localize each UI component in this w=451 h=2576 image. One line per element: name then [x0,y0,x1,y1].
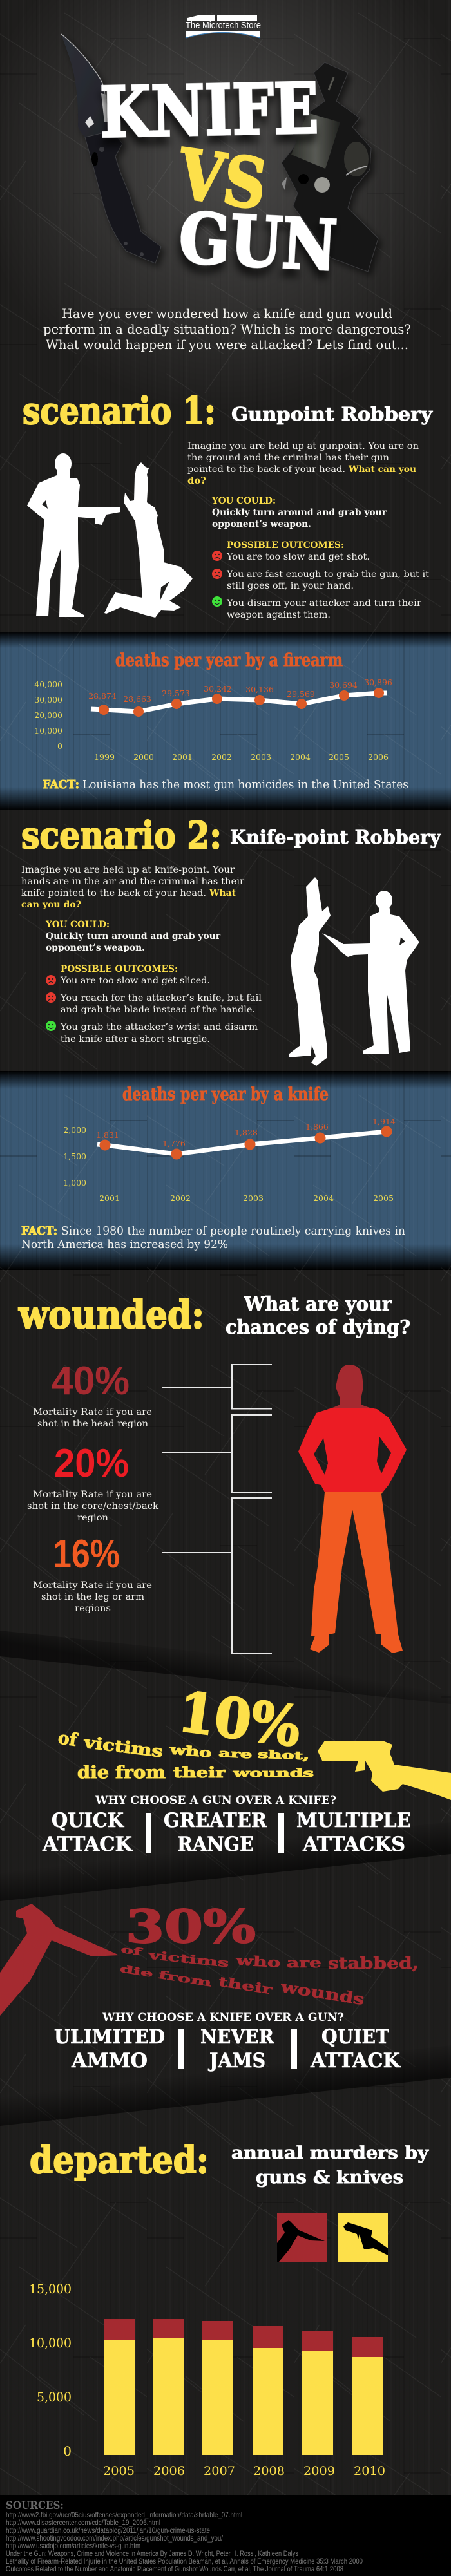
intro text: perform in a deadly situation? Which is more dangerous? [43,321,411,337]
list: why choose a gun: QUICK [52,1809,124,1832]
heading: wounded: What are your [244,1293,392,1316]
stat: 16% limbs: Mortality Rate if you are [33,1580,152,1591]
stat: 20% core: shot in the core/chest/back [27,1501,159,1511]
stat: 10% of shot victims die: are [218,1747,253,1761]
list: why choose a gun: RANGE [177,1833,254,1856]
line chart: deaths per year by a firearm: 28,874 [88,691,117,701]
line chart: deaths per year by a firearm: 30,000 [34,695,62,705]
line chart: deaths per year by a knife: 2005 [373,1193,394,1203]
text: scenario 1 description: What can you [348,464,416,475]
list: why choose a gun: MULTIPLE [296,1809,411,1832]
list: why choose a gun: ATTACK [42,1833,133,1856]
stat: 20% core [27,1441,159,1523]
heading: scenario 2 [21,813,441,857]
heading: scenario 1 [23,389,433,433]
footer: sources: http://www.disastercenter.com/cdc/Table_19_2006.html [6,2518,160,2527]
intro text [43,306,411,352]
logo: The Microtech Store: The Microtech Store [186,20,261,31]
fact: knife carrying: FACT: [21,1224,57,1238]
heading: scenario 2: Knife-point Robbery [230,826,441,848]
list: why choose a gun: WHY CHOOSE A GUN OVER A KNIFE? [95,1794,336,1807]
stacked bar chart: annual murders: 2005 [103,2464,135,2478]
text: scenario 1 description: do? [187,476,206,486]
stacked bar chart: annual murders: 10,000 [29,2335,72,2351]
stat: 10% of shot victims die: die [77,1763,109,1783]
list: possible outcomes scenario 2 [46,964,262,1045]
line chart: deaths per year by a firearm: 2000 [133,752,154,762]
footer: sources [0,2496,451,2576]
list: why choose a knife: JAMS [207,2049,265,2072]
stat: 16% limbs: regions [75,1604,111,1614]
text: you could [45,920,221,953]
text: scenario 1 description [187,441,419,486]
line chart: deaths per year by a firearm: 30,896 [364,677,392,687]
stat: 30% of stabbed victims die [119,1900,419,2009]
line chart: deaths per year by a firearm: 30,136 [245,685,274,694]
figure: body regions [298,1365,407,1653]
fact: Louisiana: Louisiana has the most gun homicides in the United States [82,778,408,791]
list: why choose a gun: ATTACKS [302,1833,405,1856]
stat: 30% of stabbed victims die: 30% [126,1900,256,1953]
line chart: deaths per year by a knife: 1,500 [63,1151,86,1161]
line chart: deaths per year by a firearm: 10,000 [34,726,62,735]
line chart: deaths per year by a knife: 2001 [99,1193,120,1203]
line chart: deaths per year by a firearm: 2005 [329,752,349,762]
stat: 10% of shot victims die: of [57,1728,80,1750]
intro text: Have you ever wondered how a knife and gun would [62,306,392,321]
stat: 40% head: Mortality Rate if you are [33,1407,152,1417]
line chart: deaths per year by a knife: 2003 [243,1193,264,1203]
line chart: deaths per year by a knife: 1,866 [305,1122,329,1132]
icon: revolver [282,62,378,272]
list: possible outcomes scenario 2: the knife after a short struggle. [61,1034,210,1045]
list: possible outcomes scenario 1: You are fast enough to grab the gun, but it [226,569,429,580]
stat: 16% limbs: 16% [53,1532,120,1577]
icon: sad face [212,551,222,561]
heading: scenario 1: Gunpoint Robbery [231,403,433,425]
icon: sad face [46,992,56,1003]
icon: sad face [212,569,222,579]
list: possible outcomes scenario 2: and grab the blade instead of the handle. [61,1005,255,1015]
text: scenario 2 description: knife pointed to the back of your head. [21,888,206,898]
heading: scenario 1: scenario 1: [23,389,216,433]
line chart: deaths per year by a firearm: 2006 [368,752,389,762]
line chart: deaths per year by a firearm: 29,569 [287,689,315,699]
stacked bar chart: annual murders: 2010 [354,2464,385,2478]
stat: 30% of stabbed victims die: victims [147,1948,229,1971]
text: scenario 2 description: Imagine you are held up at knife-point. Your [21,865,235,875]
stat: 30% of stabbed victims die: from [158,1969,213,1990]
list: possible outcomes scenario 1: POSSIBLE OUTCOMES: [227,540,344,551]
footer: sources: http://www.shootingvoodoo.com/index.php/articles/gunshot_wounds_and_you/ [6,2533,224,2543]
heading: scenario 2: scenario 2: [21,813,222,857]
stat: 16% limbs [33,1532,152,1614]
line chart: deaths per year by a firearm: 1999 [94,752,115,762]
heading: departed [30,2138,429,2188]
text: scenario 2 description [21,865,244,910]
list: possible outcomes scenario 1: weapon against them. [227,610,331,620]
text: you could [211,496,387,529]
list: why choose a knife: NEVER [200,2025,274,2049]
line chart: deaths per year by a knife: 1,831 [96,1130,119,1140]
list: possible outcomes scenario 1: You are too slow and get shot. [226,552,370,562]
stat: 30% of stabbed victims die: who [235,1952,281,1971]
stacked bar chart: annual murders: 5,000 [37,2389,72,2405]
line chart: deaths per year by a knife: 1,914 [372,1117,396,1126]
footer: sources: Lethality of Firearm-Related Injurie in the United States Population Beaman, et al, Annals of Emergency Medicine 35:3 March 2000 [6,2557,363,2566]
line chart: deaths per year by a firearm: 2004 [290,752,311,762]
text: scenario 2 description: What [209,888,236,898]
intro text: What would happen if you were attacked? Lets find out... [46,337,408,352]
stacked bar chart: annual murders: 2007 [204,2464,235,2478]
list: why choose a knife: ULIMITED [54,2025,165,2049]
icon: folding knife [61,34,161,263]
stat: 10% of shot victims die: who [168,1741,213,1761]
list: possible outcomes scenario 2: You grab the attacker’s wrist and disarm [60,1022,258,1032]
list: why choose a gun [42,1794,411,1856]
line chart: deaths per year by a firearm: 2001 [172,752,193,762]
fact: knife carrying: North America has increased by 92% [21,1238,228,1251]
list: why choose a knife [54,2011,401,2072]
text: you could: Quickly turn around and grab your [212,507,387,518]
stat: 10% of shot victims die: 10% [175,1680,304,1759]
line chart: deaths per year by a firearm: 29,573 [162,688,190,698]
list: why choose a knife: ATTACK [310,2049,401,2072]
chart title: firearm deaths: deaths per year by a firearm [115,650,343,670]
list: possible outcomes scenario 1 [212,540,429,620]
footer: sources: http://www.usadojo.com/articles/knife-vs-gun.htm [6,2541,140,2550]
stat: 30% of stabbed victims die: stabbed, [328,1954,419,1973]
heading: departed: annual murders by [231,2143,429,2163]
stat: 10% of shot victims die: shot, [258,1748,309,1763]
stacked bar chart: annual murders: 15,000 [29,2281,72,2297]
heading: wounded [18,1293,410,1339]
heading: departed: departed: [30,2138,209,2182]
text: you could: opponent’s weapon. [46,943,145,953]
silhouette: gunman and kneeling victim [27,453,193,618]
line chart: deaths per year by a knife: 1,776 [162,1139,186,1148]
stat: 30% of stabbed victims die: their [218,1974,274,1998]
legend: gun [338,2213,388,2262]
icon: hand with knife [0,1904,119,2016]
stacked bar chart: annual murders: 2009 [303,2464,335,2478]
stat: 10% of shot victims die: their [173,1765,226,1781]
list: why choose a gun: GREATER [164,1809,267,1832]
line chart: deaths per year by a firearm: 28,663 [123,694,151,704]
fact: Louisiana: FACT: [43,778,79,791]
list: why choose a knife: QUIET [321,2025,389,2049]
list: possible outcomes scenario 1: You disarm your attacker and turn their [226,598,421,609]
heading: wounded: chances of dying? [225,1316,410,1339]
chart title: knife deaths: deaths per year by a knife [122,1084,329,1104]
silhouette: knife attacker and victim [289,877,419,1066]
stat: 30% of stabbed victims die: of [120,1944,144,1958]
icon: hand with gun [318,1741,451,1800]
fact: knife carrying: Since 1980 the number of people routinely carrying knives in [61,1224,405,1238]
footer: sources: SOURCES: [6,2499,64,2512]
stat: 10% of shot victims die: victims [82,1733,164,1761]
text: scenario 2 description: can you do? [21,900,81,910]
title: VS: VS [173,133,271,225]
logo: The Microtech Store [186,15,261,38]
stacked bar chart: annual murders [29,2281,385,2478]
line chart: deaths per year by a knife: 2004 [313,1193,334,1203]
line chart: deaths per year by a knife: 2,000 [63,1125,86,1135]
line chart: deaths per year by a firearm [34,677,392,762]
heading: wounded: wounded: [18,1293,204,1338]
stat: 40% head: 40% [52,1359,130,1403]
footer: sources: Outcomes Related to the Number and Anatomic Placement of Gunshot Wounds Carr, et al, The Journal of Trauma 64:1 2008 [6,2564,343,2573]
line chart: deaths per year by a knife: 1,828 [235,1128,258,1137]
stacked bar chart: annual murders: 2008 [253,2464,285,2478]
fact: knife carrying [21,1224,405,1251]
footer: sources: http://www.guardian.co.uk/news/datablog/2011/jan/10/gun-crime-us-state [6,2526,210,2535]
stat: 20% core: 20% [54,1441,129,1486]
line chart: deaths per year by a firearm: 30,694 [329,680,358,690]
stat: 10% of shot victims die: from [115,1763,166,1783]
brackets linking stats to body [162,1365,272,1653]
stat: 10% of shot victims die: wounds [232,1766,314,1780]
text: scenario 1 description: the ground and the criminal has their gun [187,453,389,463]
line chart: deaths per year by a firearm: 20,000 [34,710,62,720]
list: possible outcomes scenario 2: You are too slow and get sliced. [60,976,210,986]
stat: 20% core: region [77,1513,108,1523]
icon: sad face [46,975,56,985]
line chart: deaths per year by a firearm: 0 [57,741,62,751]
line chart: deaths per year by a knife: 2002 [170,1193,191,1203]
icon: happy face [212,596,222,607]
title: KNIFE: KNIFE [99,68,319,153]
heading: departed: guns & knives [256,2168,403,2188]
list: possible outcomes scenario 2: You reach for the attacker’s knife, but fail [60,993,262,1003]
title: GUN: GUN [177,198,339,287]
footer: sources: http://www2.fbi.gov/ucr/05cius/offenses/expanded_information/data/shrtable_07.html [6,2510,242,2519]
line chart: deaths per year by a firearm: 40,000 [34,679,62,689]
line chart: deaths per year by a knife: 1,000 [63,1178,86,1188]
stacked bar chart: annual murders: 2006 [153,2464,185,2478]
line chart: deaths per year by a firearm: 2002 [211,752,232,762]
stat: 16% limbs: shot in the leg or arm [41,1592,144,1602]
text: you could: Quickly turn around and grab your [46,931,221,942]
legend: knife [277,2213,327,2262]
line chart: deaths per year by a knife [63,1117,396,1203]
list: why choose a knife: AMMO [71,2049,148,2072]
stat: 30% of stabbed victims die: wounds [279,1977,366,2009]
stacked bar chart: annual murders: 0 [63,2443,72,2459]
text: you could: opponent’s weapon. [212,519,311,529]
icon: happy face [46,1021,56,1031]
text: scenario 2 description: hands are in the air and the criminal has their [21,876,244,887]
list: possible outcomes scenario 1: still goes off, in your hand. [227,581,354,591]
list: why choose a knife: WHY CHOOSE A KNIFE OVER A GUN? [102,2011,344,2024]
line chart: deaths per year by a firearm: 30,242 [204,684,232,694]
text: you could: YOU COULD: [45,920,110,930]
footer: sources: Under the Gun: Weapons, Crime and Violence in America By James D. Wright, Peter H. Rossi, Kathleen Dalys [6,2549,298,2558]
text: scenario 1 description: pointed to the back of your head. [187,464,345,475]
stat: 10% of shot victims die [57,1680,314,1783]
stat: 30% of stabbed victims die: die [119,1963,154,1980]
text: scenario 1 description: Imagine you are held up at gunpoint. You are on [187,441,419,451]
text: you could: YOU COULD: [211,496,276,506]
stat: 40% head [33,1359,152,1429]
stat: 20% core: Mortality Rate if you are [33,1490,152,1500]
line chart: deaths per year by a firearm: 2003 [251,752,271,762]
stat: 40% head: shot in the head region [37,1419,148,1429]
stat: 30% of stabbed victims die: are [287,1955,321,1971]
list: possible outcomes scenario 2: POSSIBLE OUTCOMES: [61,964,178,974]
